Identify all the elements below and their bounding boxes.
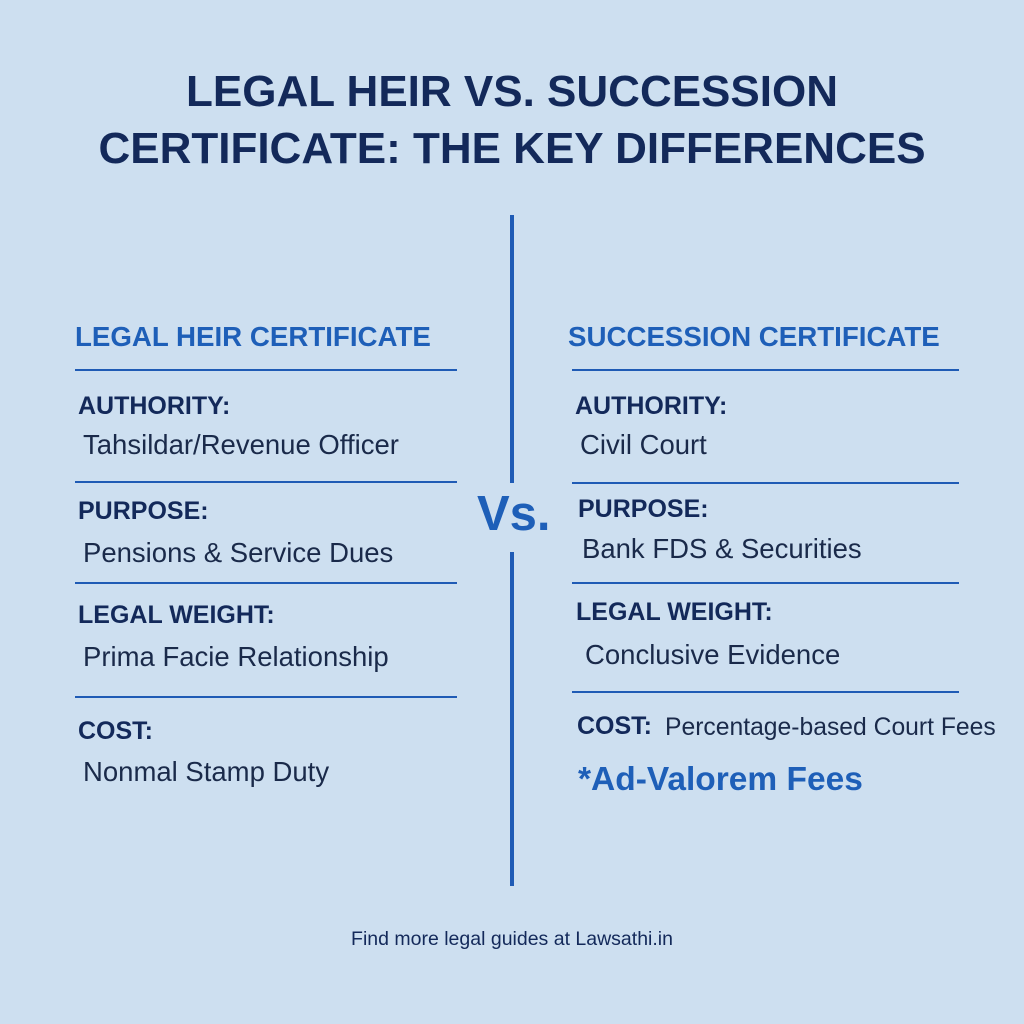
- title: LEGAL HEIR VS. SUCCESSION: [186, 67, 838, 116]
- cost label: COST:: [577, 712, 652, 740]
- legal weight label: LEGAL WEIGHT:: [576, 598, 773, 626]
- cost value: Percentage-based Court Fees: [665, 714, 996, 741]
- purpose value: Pensions & Service Dues: [83, 537, 393, 568]
- panel: succession certificate: [568, 321, 996, 798]
- legal weight value: Prima Facie Relationship: [83, 641, 389, 672]
- legal weight value: Conclusive Evidence: [585, 639, 840, 670]
- purpose label: PURPOSE:: [578, 495, 709, 523]
- heading: legal heir: LEGAL HEIR CERTIFICATE: [75, 321, 431, 352]
- vs label: Vs.: [477, 487, 551, 541]
- authority label: AUTHORITY:: [78, 392, 230, 420]
- authority value: Civil Court: [580, 429, 707, 460]
- legal weight label: LEGAL WEIGHT:: [78, 601, 275, 629]
- ad-valorem note: *Ad-Valorem Fees: [578, 761, 863, 798]
- purpose value: Bank FDS & Securities: [582, 533, 862, 564]
- footer: Find more legal guides at Lawsathi.in: [351, 928, 673, 950]
- divider: vertical line bottom: [510, 552, 514, 886]
- title: CERTIFICATE: THE KEY DIFFERENCES: [98, 124, 926, 173]
- purpose label: PURPOSE:: [78, 497, 209, 525]
- heading: succession: SUCCESSION CERTIFICATE: [568, 321, 940, 352]
- authority label: AUTHORITY:: [575, 392, 727, 420]
- panel: legal heir certificate: [75, 321, 457, 787]
- divider: vertical line top: [510, 215, 514, 483]
- authority value: Tahsildar/Revenue Officer: [83, 429, 399, 460]
- cost label: COST:: [78, 717, 153, 745]
- cost value: Nonmal Stamp Duty: [83, 756, 329, 787]
- title: [98, 67, 926, 173]
